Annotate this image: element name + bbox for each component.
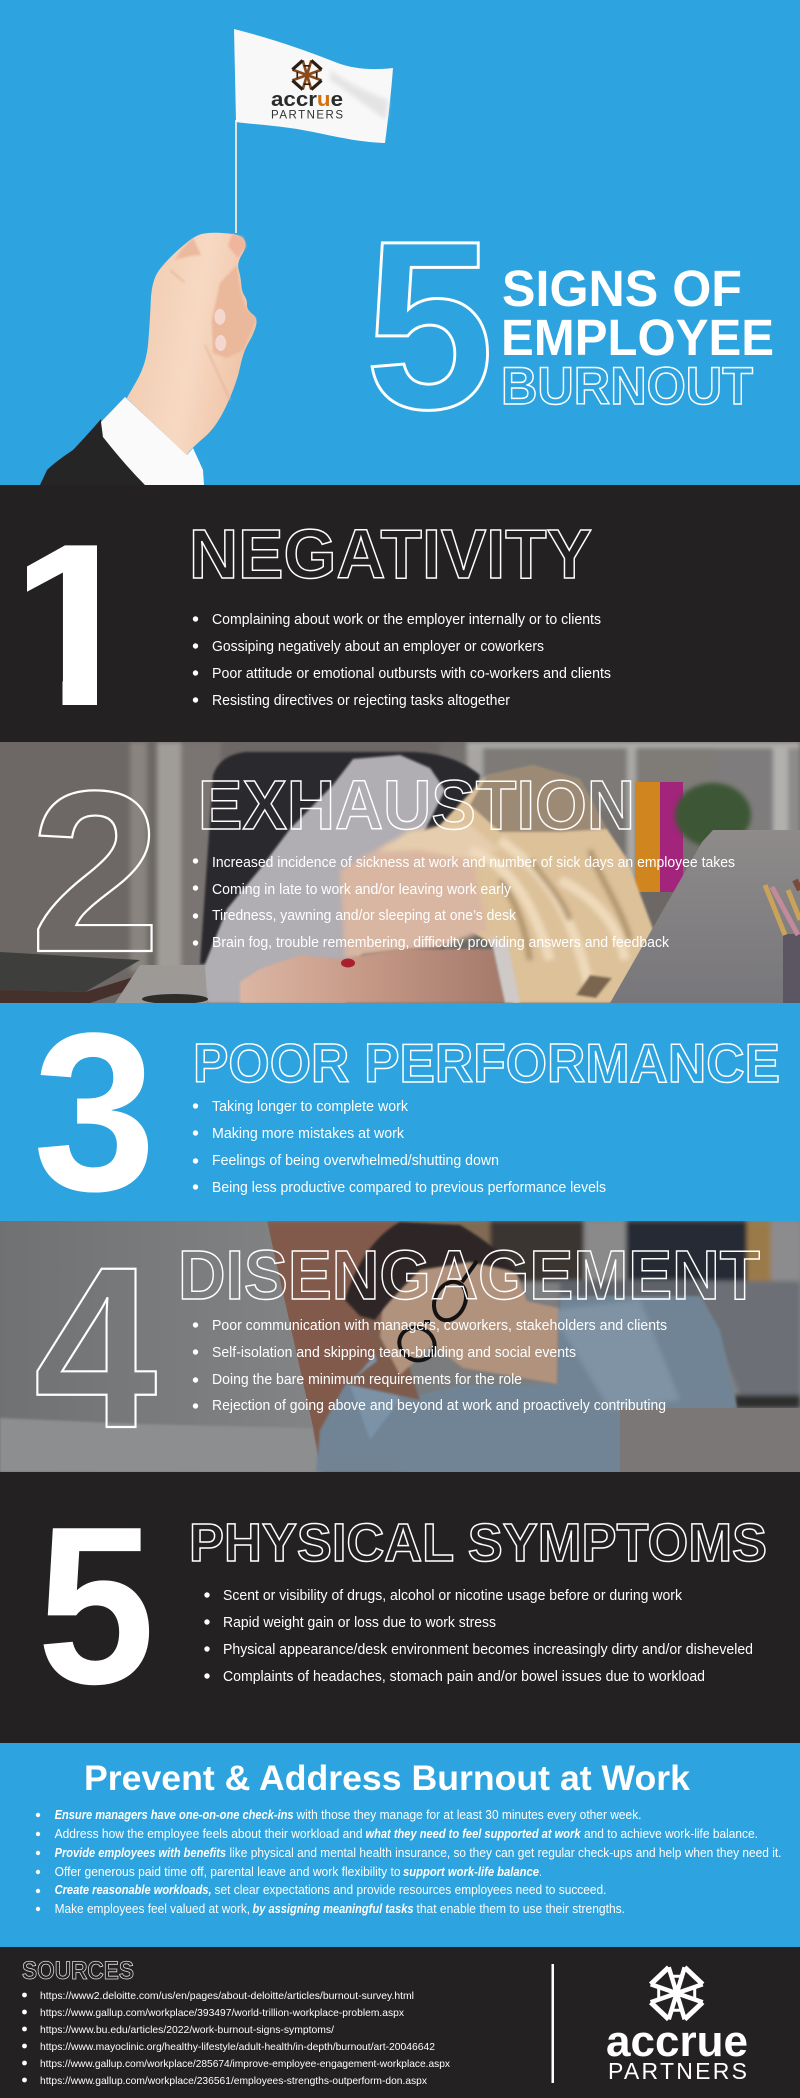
icon: hand — [127, 233, 257, 455]
shirt — [316, 1296, 737, 1472]
logo subtext: PARTNERS — [271, 110, 343, 122]
panel: poor performance — [0, 985, 800, 1238]
list: prevention tips: and to achieve work-life balance. — [584, 1827, 758, 1841]
numeral 5: 5 — [37, 1479, 155, 1731]
desk — [115, 965, 207, 1003]
icon: flag logo mark — [292, 60, 322, 90]
background stripes — [267, 1221, 800, 1472]
list: prevention tips: Create reasonable workloads, — [55, 1883, 212, 1897]
photo: stressed man at laptop — [0, 1221, 800, 1472]
list: source links: https://www.bu.edu/articles/2022/work-burnout-signs-symptoms/ — [40, 2025, 334, 2036]
list: prevention tips: that enable them to use their strengths. — [416, 1902, 625, 1916]
heading: disengagement: DISENGAGEMENT — [178, 1236, 760, 1314]
list: disengagement signs: Poor communication with managers, coworkers, stakeholders and clients — [212, 1317, 667, 1334]
list: prevention tips: set clear expectations and provide resources employees need to succeed. — [214, 1883, 606, 1897]
list: prevention tips: Provide employees with benefits — [55, 1846, 226, 1860]
list: disengagement signs: Rejection of going above and beyond at work and proactively contributing — [212, 1397, 666, 1414]
icon: flag pole — [235, 120, 237, 233]
logo wordmark: partners: PARTNERS — [608, 2058, 747, 2084]
icon: shirt cuff — [101, 397, 204, 485]
list: negativity signs — [193, 611, 611, 709]
list: source links: https://www.gallup.com/workplace/393497/world-trillion-workplace-problem.aspx — [40, 2008, 405, 2019]
numeral 4: 4 — [34, 1219, 157, 1476]
list: physical signs: Scent or visibility of drugs, alcohol or nicotine usage before or during work — [223, 1587, 682, 1604]
pencil cup — [783, 934, 800, 1003]
list: prevention tips: what they need to feel supported at work — [366, 1827, 581, 1841]
list: negativity signs: Resisting directives or rejecting tasks altogether — [212, 692, 510, 709]
list: disengagement signs — [193, 1317, 667, 1414]
heading: prevent and address burnout: Prevent & Address Burnout at Work — [84, 1759, 691, 1798]
numeral 3: 3 — [33, 985, 156, 1238]
list: source links: https://www.gallup.com/workplace/285674/improve-employee-engagement-workplace.aspx — [40, 2059, 451, 2070]
heading: poor performance: POOR PERFORMANCE — [193, 1032, 780, 1094]
list: exhaustion signs: Coming in late to work and/or leaving work early — [212, 881, 511, 898]
list: physical signs: Complaints of headaches, stomach pain and/or bowel issues due to workload — [223, 1668, 705, 1685]
panel: prevent and address — [0, 1743, 800, 1947]
list: exhaustion signs — [193, 854, 735, 951]
tablet — [0, 952, 140, 992]
logo text: accrue — [271, 89, 343, 111]
monitor left — [214, 1221, 317, 1472]
list: prevention tips: . — [539, 1865, 542, 1879]
title line: signs of: SIGNS OF — [502, 260, 742, 317]
list: source links — [22, 1991, 451, 2087]
heading: exhaustion: EXHAUSTION — [198, 766, 635, 844]
heading: negativity: NEGATIVITY — [189, 515, 592, 593]
chair — [200, 752, 480, 970]
list: prevention tips: with those they manage for at least 30 minutes every other week. — [296, 1808, 642, 1822]
arm — [347, 1345, 420, 1401]
list: exhaustion signs: Increased incidence of sickness at work and number of sick days an employee takes — [212, 854, 735, 871]
list: prevention tips: by assigning meaningful tasks — [252, 1902, 414, 1916]
list: prevention tips: Ensure managers have one-on-one check-ins — [55, 1808, 294, 1822]
list: prevention tips: Offer generous paid time off, parental leave and work flexibility to — [55, 1865, 401, 1879]
list: negativity signs: Complaining about work or the employer internally or to clients — [212, 611, 601, 628]
icon: accrue logo mark — [651, 1967, 703, 2019]
title line: employee: EMPLOYEE — [501, 309, 774, 366]
panel: exhaustion — [0, 742, 800, 1004]
list: prevention tips — [36, 1808, 782, 1916]
list: prevention tips: like physical and mental health insurance, so they can get regular check-ups and help when they need it. — [230, 1846, 782, 1860]
list: performance signs — [193, 1098, 606, 1196]
list: disengagement signs: Self-isolation and skipping team-building and social events — [212, 1344, 576, 1361]
icon: suit sleeve — [40, 419, 145, 485]
list: source links: https://www2.deloitte.com/us/en/pages/about-deloitte/articles/burnout-survey.html — [40, 1991, 414, 2002]
numeral 2: 2 — [30, 743, 161, 1000]
list: exhaustion signs: Brain fog, trouble remembering, difficulty providing answers and feedback — [212, 934, 669, 951]
hair — [345, 1222, 517, 1320]
shirt — [203, 755, 445, 1003]
title: big numeral 5: 5 — [365, 191, 494, 459]
panel: header — [0, 0, 800, 485]
heading: physical symptoms: PHYSICAL SYMPTOMS — [189, 1513, 767, 1573]
list: source links: https://www.mayoclinic.org/healthy-lifestyle/adult-health/in-depth/burnout/art-20046642 — [40, 2042, 435, 2053]
list: physical signs: Physical appearance/desk environment becomes increasingly dirty and/or disheveled — [223, 1641, 753, 1658]
list: performance signs: Feelings of being overwhelmed/shutting down — [212, 1152, 499, 1169]
plant — [675, 783, 751, 847]
laptop — [610, 830, 800, 1003]
list: negativity signs: Poor attitude or emotional outbursts with co-workers and clients — [212, 665, 611, 682]
list: prevention tips: support work-life balance — [403, 1865, 539, 1879]
icon: flag with logo — [234, 29, 393, 143]
glasses — [394, 1261, 477, 1366]
photo: tired woman at desk — [0, 742, 800, 1004]
list: disengagement signs: Doing the bare minimum requirements for the role — [212, 1371, 522, 1388]
heading: sources: SOURCES — [22, 1957, 134, 1985]
title line: burnout: BURNOUT — [501, 357, 753, 416]
hair and face — [340, 765, 653, 1003]
list: prevention tips: Make employees feel valued at work, — [55, 1902, 250, 1916]
list: negativity signs: Gossiping negatively about an employer or coworkers — [212, 638, 544, 655]
list: source links: https://www.gallup.com/workplace/236561/employees-strengths-outperform-don.aspx — [40, 2076, 428, 2087]
list: physical signs — [204, 1587, 753, 1685]
books — [635, 782, 660, 892]
panel: physical symptoms — [0, 1472, 800, 1743]
panel: negativity — [0, 485, 800, 755]
laptop — [620, 1408, 800, 1472]
list: performance signs: Taking longer to complete work — [212, 1098, 408, 1115]
nail — [341, 958, 355, 968]
list: prevention tips: Address how the employee feels about their workload and — [55, 1827, 363, 1841]
face — [380, 1254, 558, 1384]
list: performance signs: Being less productive compared to previous performance levels — [212, 1179, 606, 1196]
logo wordmark: accrue: accrue — [606, 2017, 748, 2066]
panel: footer — [0, 1947, 800, 2098]
numeral 1: 1 — [0, 496, 150, 755]
list: performance signs: Making more mistakes at work — [212, 1125, 404, 1142]
list: physical signs: Rapid weight gain or loss due to work stress — [223, 1614, 496, 1631]
panel: disengagement — [0, 1219, 800, 1476]
list: exhaustion signs: Tiredness, yawning and/or sleeping at one’s desk — [212, 907, 516, 924]
arm — [240, 949, 507, 1003]
